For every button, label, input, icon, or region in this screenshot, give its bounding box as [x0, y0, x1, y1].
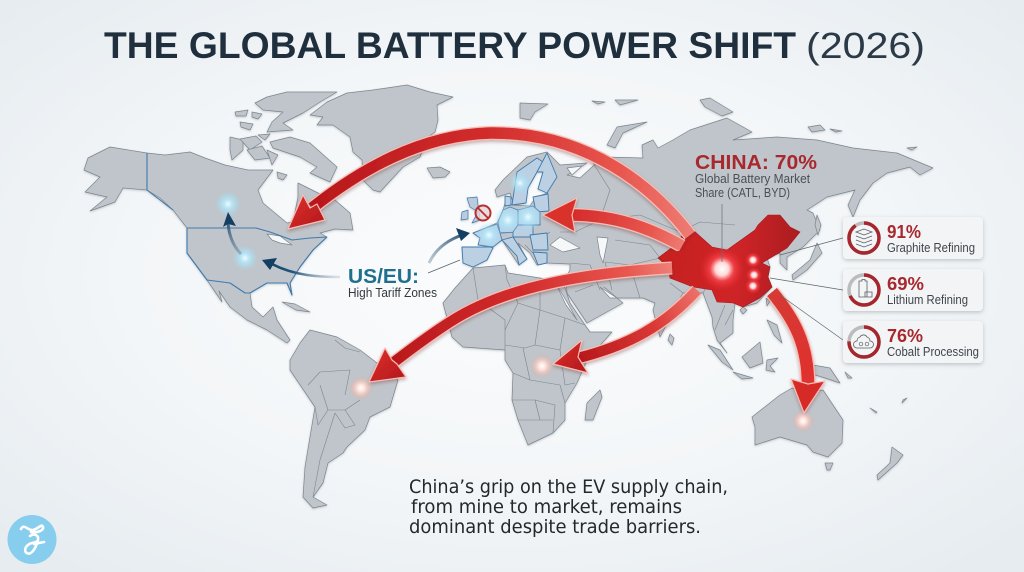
leader lines [770, 238, 843, 340]
US/EU callout [348, 266, 437, 300]
arrow: China to North America [288, 133, 690, 235]
Italy [502, 237, 527, 265]
inland seas [267, 166, 617, 320]
Germany and Benelux [498, 207, 518, 233]
Iberia [462, 247, 493, 267]
stat card: lithium refining [843, 269, 983, 311]
stat card: graphite refining: 91% [887, 222, 921, 242]
tariff prohibition icon [476, 206, 490, 220]
title: THE GLOBAL BATTERY POWER SHIFT [104, 25, 796, 66]
Sweden [512, 158, 543, 205]
Denmark [505, 196, 511, 206]
US tariff markers and arrows [215, 191, 340, 277]
Romania and Bulgaria [530, 233, 548, 250]
Poland [518, 206, 540, 225]
China core glow and hubs [700, 247, 762, 294]
summary caption: from mine to market, remains [411, 496, 682, 518]
destination glow points [349, 354, 814, 432]
arrow: China to South America [369, 268, 672, 382]
landmass: islands of Asia and Oceania [282, 98, 917, 480]
ring: 76 percent [849, 327, 879, 357]
US/EU callout: High Tariff Zones [348, 286, 437, 300]
world map [84, 85, 933, 508]
landmass: Madagascar [585, 390, 602, 420]
landmass: South America [290, 330, 398, 508]
borders: United States and Canada [147, 153, 327, 295]
ring: 91 percent [849, 223, 879, 253]
title: (2026) [806, 25, 925, 66]
US/EU callout: US/EU: [348, 266, 419, 288]
landmass: Greenland [310, 85, 453, 192]
France [473, 224, 502, 247]
stat card: cobalt processing: 76% [887, 326, 923, 346]
stat card: graphite refining: Graphite Refining [887, 241, 975, 255]
landmass: Arctic Canada islands [230, 92, 337, 182]
summary caption: dominant despite trade barriers. [409, 516, 701, 538]
stat card: cobalt processing: Cobalt Processing [887, 345, 979, 359]
arrow: China to Europe [543, 198, 682, 246]
arrow: China to Africa [553, 290, 697, 373]
EU tariff arrow [428, 228, 470, 273]
country borders [308, 158, 735, 497]
logo badge [8, 515, 56, 564]
landmass: Iceland [427, 167, 450, 178]
landmass: North America [84, 147, 353, 343]
China territory highlight [658, 215, 800, 307]
European glow points [476, 172, 542, 248]
Czechia and Austria [513, 225, 533, 237]
landmass: Eurasia [462, 118, 933, 353]
China callout: CHINA: 70% [695, 152, 817, 174]
stat card: lithium refining: Lithium Refining [887, 293, 968, 307]
Finland [537, 153, 557, 193]
summary caption: China’s grip on the EV supply chain, [409, 476, 728, 498]
arrow: China to Australia [772, 292, 825, 413]
European Union high tariff zone [462, 153, 557, 267]
landmass: British Isles [467, 197, 480, 223]
stat card: graphite refining [843, 217, 983, 259]
stat card: cobalt processing [843, 321, 983, 363]
summary caption [409, 476, 728, 538]
China callout: Share (CATL, BYD) [695, 185, 790, 200]
China callout: Global Battery Market [695, 171, 810, 186]
Baltic states [533, 194, 549, 212]
stat card: lithium refining: 69% [887, 274, 924, 294]
landmass: Australia [752, 388, 843, 457]
landmass: Africa [443, 265, 612, 445]
ring: 69 percent [849, 275, 879, 305]
Greece [533, 252, 547, 265]
China callout [695, 152, 817, 262]
